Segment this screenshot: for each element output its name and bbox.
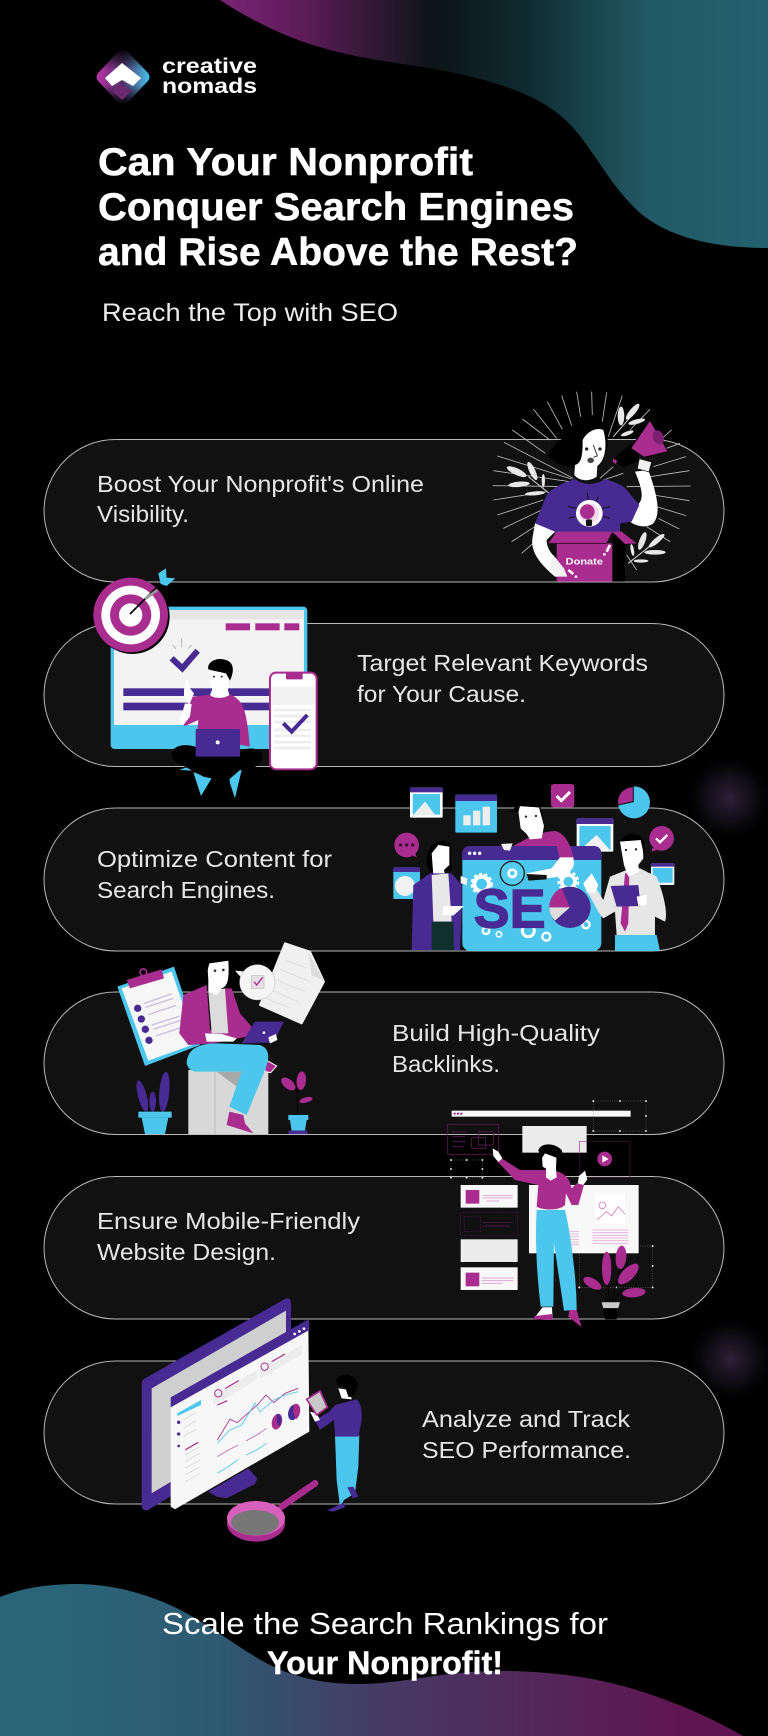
browser bar [452,1111,631,1117]
main SEO board: SE [474,877,546,939]
right arm [630,470,658,526]
pill [44,1361,724,1504]
woman [493,1144,587,1327]
frame handles [450,1100,654,1288]
dotted frames [451,1101,653,1287]
panel: backlinks [44,943,724,1134]
illustration: analytics dashboard [142,1298,362,1542]
logo wordmark [162,55,257,98]
title [98,141,578,274]
bottom gradient blob [0,1584,743,1736]
face and neck [574,429,605,480]
closing line: Your Nonprofit! [267,1645,503,1681]
title: Conquer Search Engines [98,186,574,229]
text: SEO Performance. [422,1437,631,1463]
text [422,1406,631,1463]
side cards [461,1185,518,1290]
panel: boost visibility [44,392,724,582]
text: Boost Your Nonprofit's Online [97,471,424,497]
text [392,1020,600,1077]
glow: lower right [689,1317,768,1401]
video card [579,1142,630,1177]
monitor back [142,1298,291,1510]
text: Ensure Mobile-Friendly [97,1208,360,1234]
magnifier [227,1483,315,1542]
sunburst rays [493,392,691,570]
text: Target Relevant Keywords [357,650,648,676]
title: Can Your Nonprofit [98,141,473,184]
pill [44,992,724,1134]
gray block [522,1126,587,1153]
glow: upper right [687,756,768,840]
box: Donate [566,556,603,566]
illustration: woman presenting web layouts [448,1100,654,1327]
left hand [550,555,567,577]
panel: optimize content [44,784,724,951]
panel: analyze and track [44,1298,724,1542]
pill [44,808,724,951]
man centre [501,798,574,881]
text: Website Design. [97,1239,276,1265]
text: Search Engines. [97,877,275,903]
main SEO board [462,846,601,951]
outline card [448,1124,498,1154]
plant left [134,1071,172,1134]
illustration: man on seat with clipboard [117,943,324,1134]
paper [260,943,324,1023]
pill [44,440,724,582]
phone [270,673,317,769]
illustration: woman with megaphone and donate box [493,392,691,582]
logo mark [96,50,150,104]
person [172,659,263,798]
closing line: Scale the Search Rankings for [162,1606,608,1641]
logo wordmark: nomads [162,75,257,98]
hair [546,421,608,468]
woman left [412,841,467,950]
pill [44,1176,724,1319]
top corner gradient blob [220,0,768,248]
title: and Rise Above the Rest? [98,231,578,274]
megaphone [613,420,668,472]
speech bubble [235,965,275,1000]
subtitle: Reach the Top with SEO [102,299,398,327]
large content card [529,1185,639,1253]
pill [44,624,724,766]
floating windows [393,784,674,899]
man [179,953,284,1134]
text [97,846,332,903]
person with clipboard [307,1375,362,1512]
website screen [111,607,307,749]
plant [581,1245,646,1319]
text: Backlinks. [392,1051,500,1077]
shirt [535,479,639,533]
panel: mobile friendly [44,1100,724,1327]
logo: creative nomads [96,50,257,104]
logo wordmark: creative [162,55,257,78]
text [357,650,648,707]
bulb emblem [568,493,610,527]
text [97,1208,360,1265]
text: Visibility. [97,501,189,527]
man right [583,834,666,951]
left arm [532,523,567,577]
text [97,471,424,527]
text: for Your Cause. [357,681,526,707]
illustration: person with laptop, target and phone [93,568,317,798]
clipboard [117,967,200,1066]
dashboard window [171,1320,309,1509]
leaves [506,402,666,563]
panel: target keywords [44,568,724,798]
text: Optimize Content for [97,846,332,872]
illustration: SEO team [393,784,674,951]
target with dart [93,568,175,654]
box [548,532,637,582]
text: Analyze and Track [422,1406,630,1432]
text: Build High-Quality [392,1020,600,1046]
closing line [162,1606,608,1681]
plant right [279,1071,313,1134]
